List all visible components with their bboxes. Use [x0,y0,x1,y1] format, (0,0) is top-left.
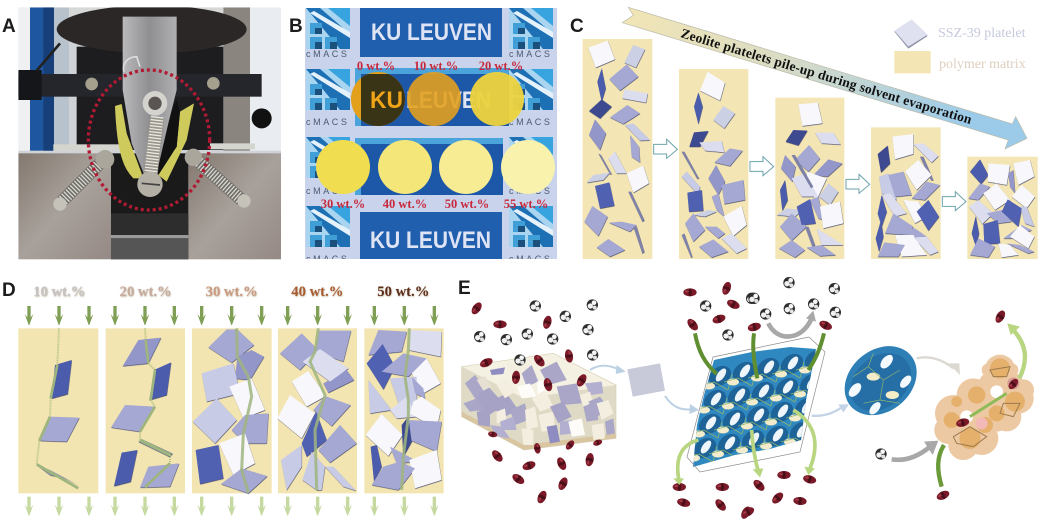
panel B label: B [289,16,303,37]
panel B: KU Leuven background with membrane discs: cMACS [509,254,553,264]
disc 40 wt.% [378,140,432,194]
column 40 wt.% [277,328,357,493]
panel D label: D [2,280,16,301]
metal disc [57,5,247,53]
disc 0 wt.%: KU [370,87,403,114]
panel E right: flows, pore and molecules [740,277,1034,519]
arrow: pore to molecular model [917,357,960,375]
metal supports [18,153,111,259]
arrows on framework, left side [673,333,717,485]
panel B: KU Leuven background with membrane discs: cMACS [509,117,553,127]
arrow: block to platelet [590,365,626,374]
arrow: small molecule passes pore [875,441,938,460]
legend platelet [894,19,928,49]
red dotted circle [88,70,210,210]
panel A label: A [2,16,16,37]
panel E label: E [458,278,471,299]
step 5 matrix [967,157,1038,259]
column 20 wt.% [106,328,185,493]
ribbon caption: Zeolite platelets pile-up during solvent evaporation [679,26,974,127]
step 2 matrix [679,69,748,259]
arrow: large molecule exits [994,309,1025,378]
step 3 matrix [775,98,844,259]
legend text: platelet: SSZ-39 platelet [938,26,1026,41]
panel B: KU Leuven background with membrane discs: cMACS [306,49,350,59]
panel B: KU Leuven background with membrane discs: KU LEUVEN [370,87,491,114]
blade [123,17,177,177]
column 10 wt.% [18,328,98,493]
framework flows and molecules [740,277,841,519]
disc 30 wt.% [316,140,370,194]
crossbar [18,74,262,97]
panel B: KU Leuven background with membrane discs: cMACS [306,186,350,196]
column headings: 50 wt.% [377,284,429,300]
column headings: 40 wt.% [291,284,343,300]
disc labels: 0 wt.% [357,59,395,73]
disc labels: 55 wt.% [504,197,548,211]
disc labels [321,59,548,211]
legend text: matrix: polymer matrix [939,57,1026,72]
molecular model of pore [934,355,1034,460]
column 30 wt.% [192,328,272,493]
panel B: KU Leuven background with membrane discs: cMACS [306,117,350,127]
disc labels: 30 wt.% [321,197,365,211]
step 4 matrix [871,127,941,259]
panel A: photo of bending test rig [18,5,281,259]
column headings [33,284,429,300]
springs [151,117,157,173]
disc labels: 10 wt.% [414,59,458,73]
step arrows [654,139,966,211]
disc 0 wt.% [351,72,405,126]
disc labels: 40 wt.% [383,197,427,211]
disc 10 wt.% [407,72,461,126]
column headings: 30 wt.% [206,284,258,300]
arrow: platelet to framework [665,396,699,414]
single platelet [627,363,665,397]
banner text: KU LEUVEN [371,19,492,46]
outgoing arrows [25,497,439,516]
panel D: gas paths at different loadings [18,284,444,516]
disc labels: 20 wt.% [479,59,523,73]
panel B: KU Leuven background with membrane discs: cMACS [509,49,553,59]
ribbon arrow [622,7,1027,149]
panel C label: C [570,16,584,37]
disc 50 wt.% [439,140,493,194]
disc 55 wt.% [501,140,555,194]
step 1 matrix [583,39,652,259]
disc 20 wt.% [470,72,524,126]
panel E centre: zeolite framework [685,337,831,472]
panel E left: composite membrane block and molecules [462,281,757,519]
panel C: platelet stacking sequence [583,7,1038,259]
column headings: 10 wt.% [33,284,85,300]
panel B: KU Leuven background with membrane discs: cMACS [306,254,350,264]
panel B: KU Leuven background with membrane discs: cMACS [509,186,553,196]
disc labels: 50 wt.% [445,197,489,211]
panel B: KU Leuven background with membrane discs [305,8,557,264]
incoming arrows [25,306,439,325]
column headings: 20 wt.% [120,284,172,300]
panel B: KU Leuven background with membrane discs: KU LEUVEN [370,227,491,254]
arrow: large molecule through pore [935,393,1007,502]
zoomed pore disc [831,332,931,429]
yellow film sample [115,103,194,182]
legend matrix swatch [894,51,931,73]
arrow: framework to pore [812,404,849,416]
membrane block [462,353,616,450]
column 50 wt.% [364,328,444,493]
molecules: large and small gas species [470,281,757,519]
